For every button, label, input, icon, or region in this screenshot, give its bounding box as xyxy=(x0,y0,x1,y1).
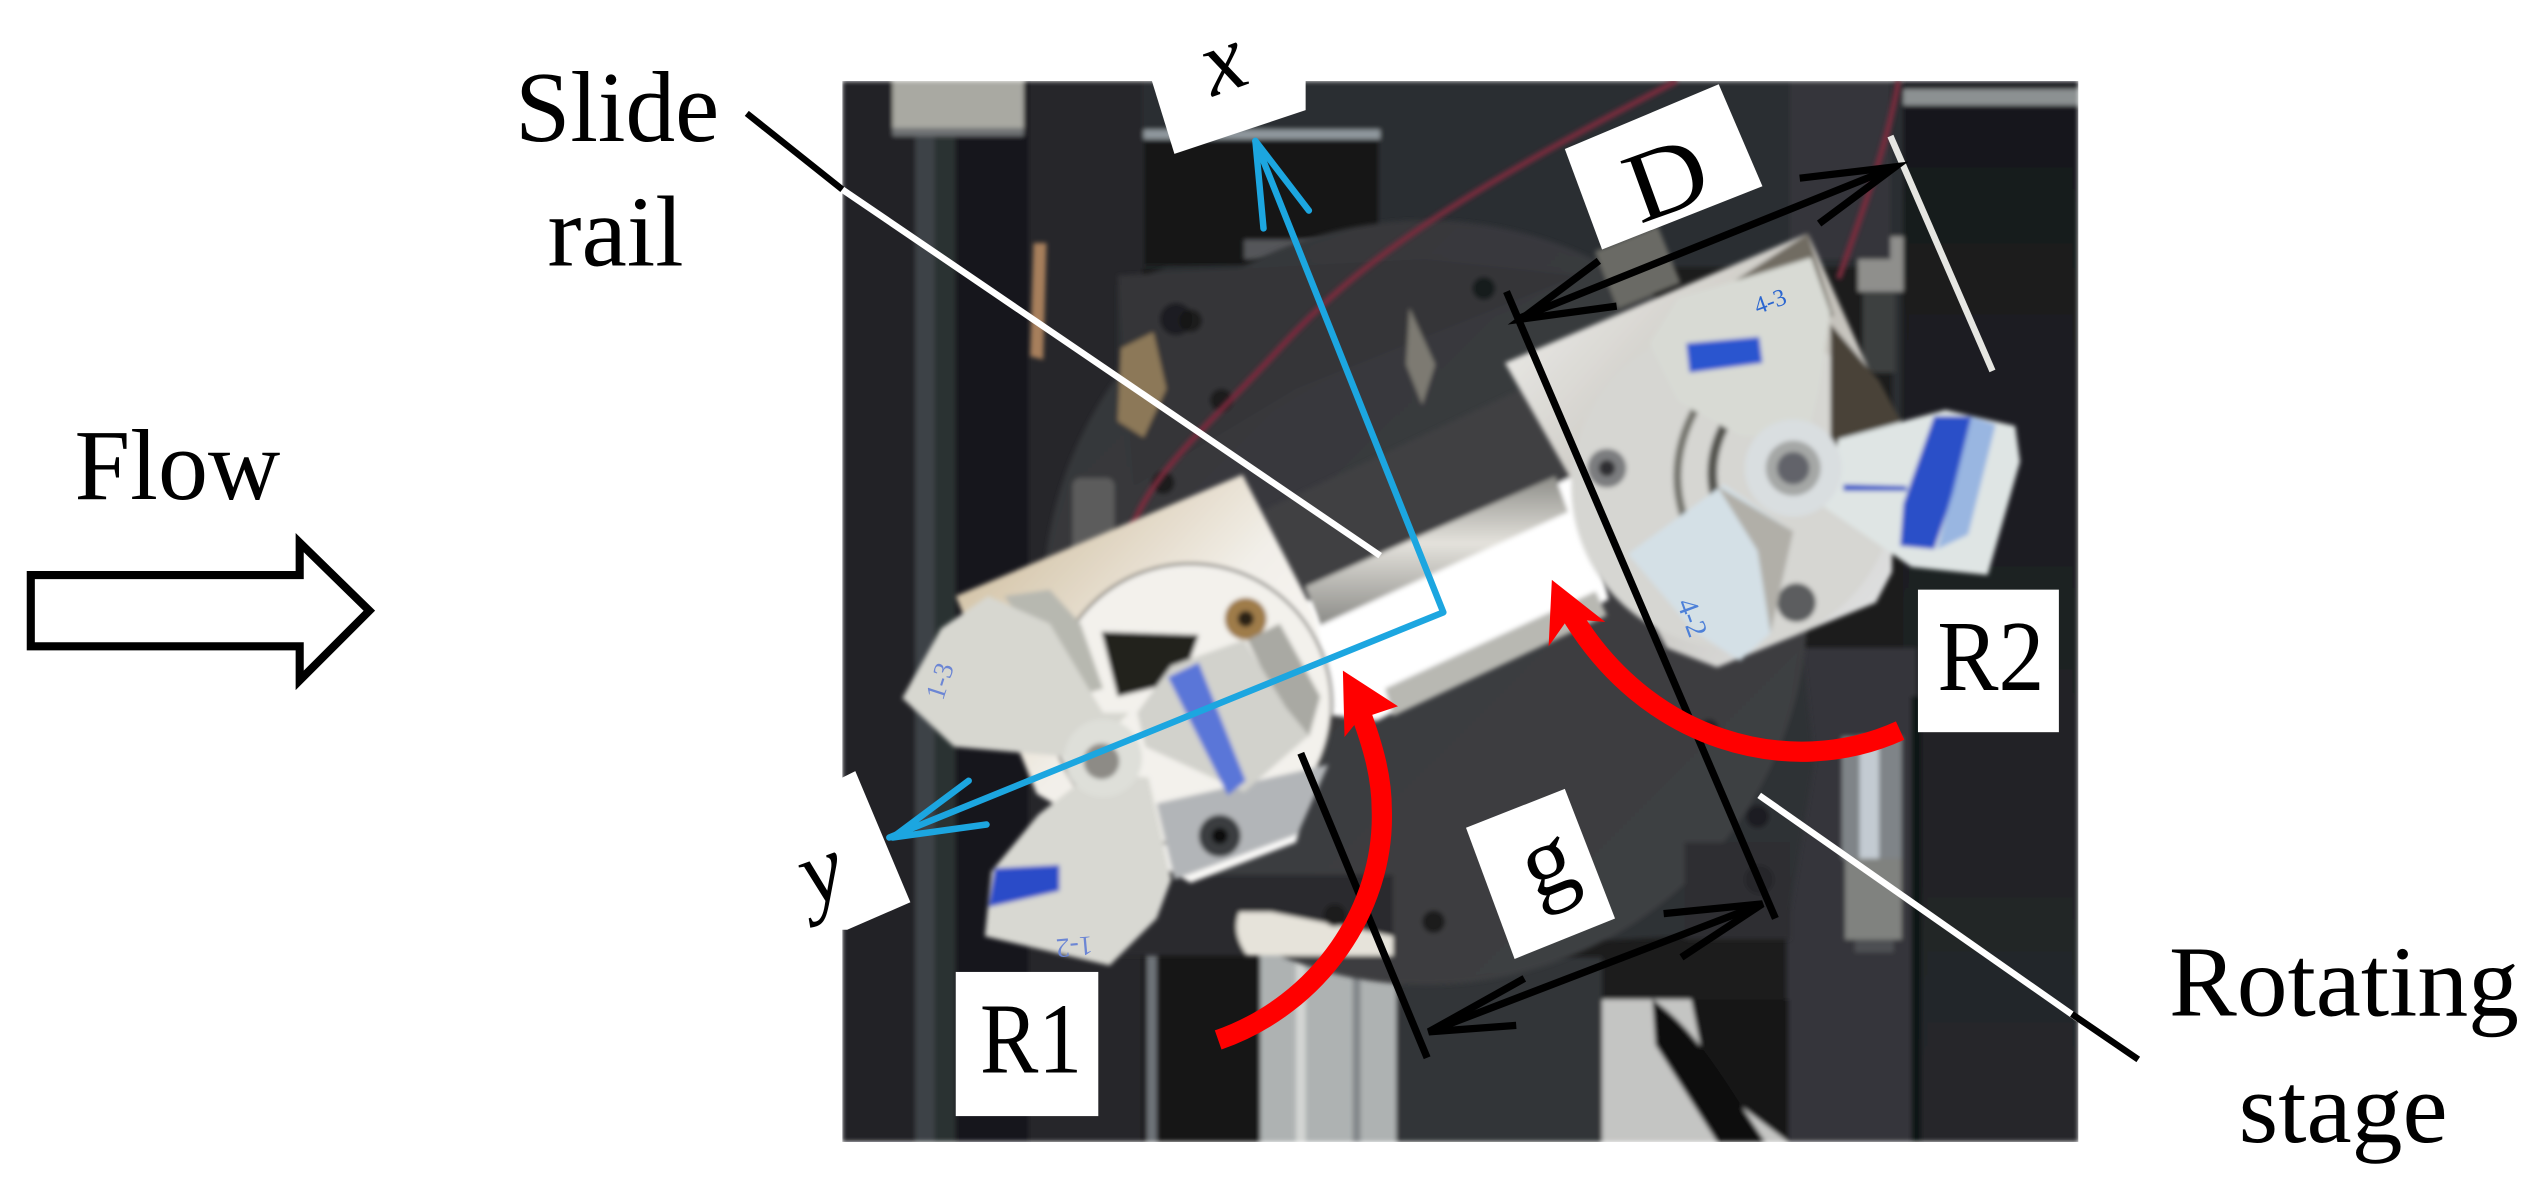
leader: rotating stage xyxy=(1759,795,2138,1059)
panel: photograph of dual rotor rig xyxy=(842,81,2078,1142)
photo background xyxy=(842,81,2078,1142)
axis label box: y: y xyxy=(775,814,858,929)
reference line: D xyxy=(1890,136,1992,371)
label: Rotating stage: stage xyxy=(2239,1053,2448,1164)
rotation arrow: R2 xyxy=(1549,580,1900,752)
dimension line: g right reference xyxy=(1507,292,1775,918)
label box: R1 xyxy=(956,972,1098,1116)
base plate and rotating stage xyxy=(1030,220,1814,985)
label box: D: D xyxy=(1609,113,1724,245)
label: Flow: Flow xyxy=(75,410,281,521)
label box: R1: R1 xyxy=(980,983,1082,1094)
blade marking 4-2: 4-2 xyxy=(1670,594,1713,642)
blade markings xyxy=(928,664,1091,957)
label box: g: g xyxy=(1502,799,1590,921)
label: Slide rail: Slide xyxy=(515,52,719,163)
axis label box: x xyxy=(1147,5,1306,154)
leader: slide rail xyxy=(747,113,1380,556)
label: Rotating stage xyxy=(2169,927,2519,1164)
blade marking 4-3: 4-3 xyxy=(1750,283,1790,320)
dimension arrow: D xyxy=(1521,167,1895,319)
label: Slide rail xyxy=(515,52,719,288)
dimension line: g left reference xyxy=(1301,753,1427,1058)
label box: g xyxy=(1466,789,1615,959)
label box: D xyxy=(1565,84,1762,249)
axes: blue coordinate arrows xyxy=(889,141,1443,837)
signal wires xyxy=(1123,81,1899,567)
left rotor assembly xyxy=(902,475,1333,965)
label box: R2: R2 xyxy=(1937,601,2044,712)
blade marking 1-3: 1-3 xyxy=(919,659,960,703)
dimension arrow: g xyxy=(1429,904,1762,1032)
slide rail body xyxy=(1264,369,1609,721)
axis label box: x: x xyxy=(1182,5,1259,117)
label: Slide rail: rail xyxy=(548,177,684,288)
axis label box: y xyxy=(775,771,910,930)
label box: R2 xyxy=(1918,590,2059,732)
right rotor assembly xyxy=(1505,233,2020,667)
label: Rotating stage: Rotating xyxy=(2169,927,2519,1038)
blade marking 1-2: 1-2 xyxy=(1055,930,1094,964)
rotation arrow: R1 xyxy=(1218,671,1398,1040)
arrow: flow direction xyxy=(31,543,369,680)
